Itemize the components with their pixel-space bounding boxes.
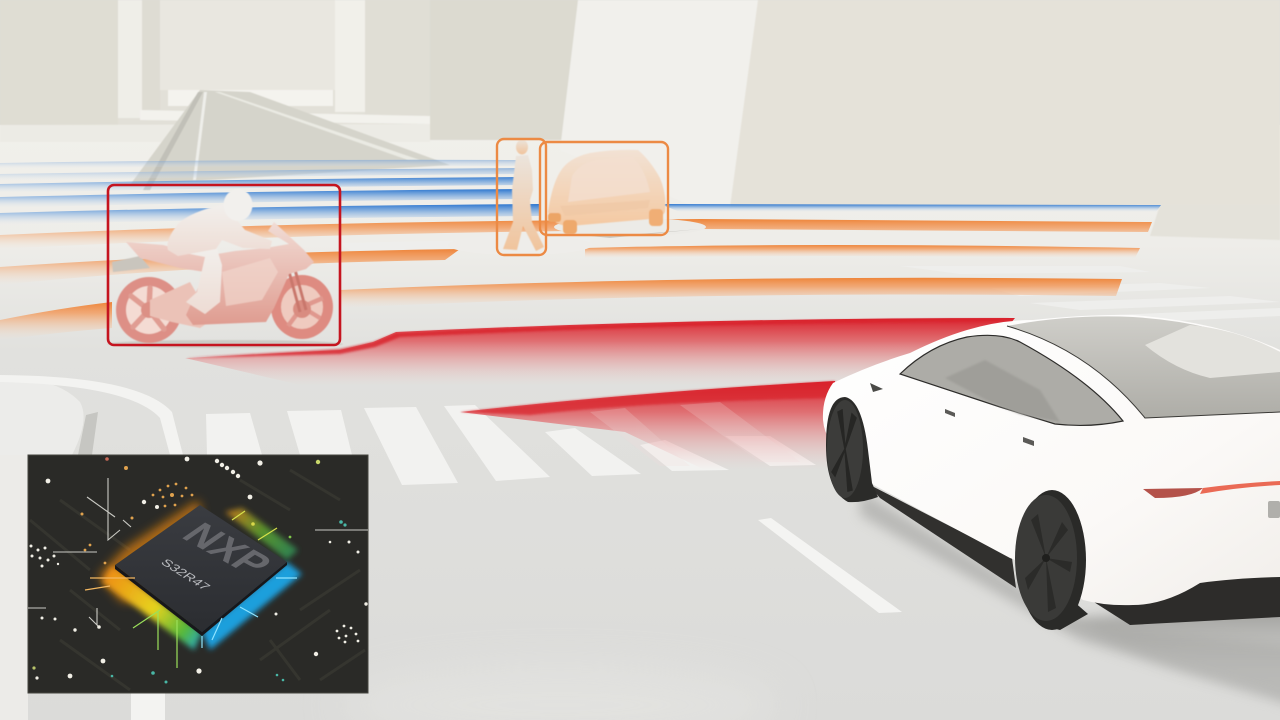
front wheel [271, 266, 333, 339]
motorcycle with rider [107, 189, 343, 348]
rider leg [170, 246, 222, 314]
kerb, left [0, 375, 183, 720]
teal and lime dots [32, 460, 347, 684]
radar bands: blue far-range [0, 160, 1161, 225]
inset: NXP S32R47 chip photo [28, 455, 368, 693]
licence plate edge [1268, 501, 1280, 518]
solder dots [30, 457, 368, 680]
bike fairing [126, 222, 314, 325]
tail light [1143, 481, 1280, 498]
side window [900, 335, 1123, 425]
car sill [868, 484, 1016, 588]
rider helmet [224, 189, 252, 221]
detection spots on road [448, 218, 706, 255]
amber dots [80, 457, 193, 564]
orange glow [98, 500, 202, 602]
fairing highlight [222, 258, 278, 306]
left edge rainbow glow [102, 566, 202, 650]
rear wheel [1015, 490, 1088, 630]
chip part number: S32R47 [158, 557, 213, 592]
car undertray [1075, 570, 1280, 625]
radar cone: far red band [185, 318, 1015, 385]
pedestrian [503, 140, 544, 251]
car ground shadow [860, 490, 1280, 720]
radar cone: near red band [460, 381, 835, 470]
chip package [115, 505, 287, 632]
coloured traces [85, 511, 297, 668]
car body [823, 315, 1280, 605]
detection box: pedestrian [497, 139, 546, 255]
detection box: motorcycle [108, 185, 340, 345]
board traces [30, 470, 365, 690]
rear wheel [116, 277, 182, 343]
mirror [870, 383, 883, 392]
far crosswalk, right [340, 238, 1280, 322]
lane marking [758, 518, 902, 613]
tail shadow [112, 256, 150, 272]
rider torso [167, 204, 272, 256]
rear swingarm [150, 282, 212, 328]
background: architecture [0, 0, 1280, 240]
right edge blue glow [202, 562, 302, 650]
road lighting patch [340, 665, 780, 720]
detection box: vehicle [540, 142, 668, 235]
car: white sedan [823, 315, 1280, 630]
front wheel [826, 397, 878, 502]
chip logo: NXP [173, 516, 282, 582]
rear glass and sunroof [1007, 316, 1280, 418]
vehicle ahead [548, 150, 665, 234]
radar bands: orange mid-range [0, 219, 1152, 340]
door handles [945, 409, 1034, 446]
crosswalk stripes [206, 405, 816, 485]
bright traces [28, 478, 368, 627]
top edge green glow [225, 508, 298, 560]
